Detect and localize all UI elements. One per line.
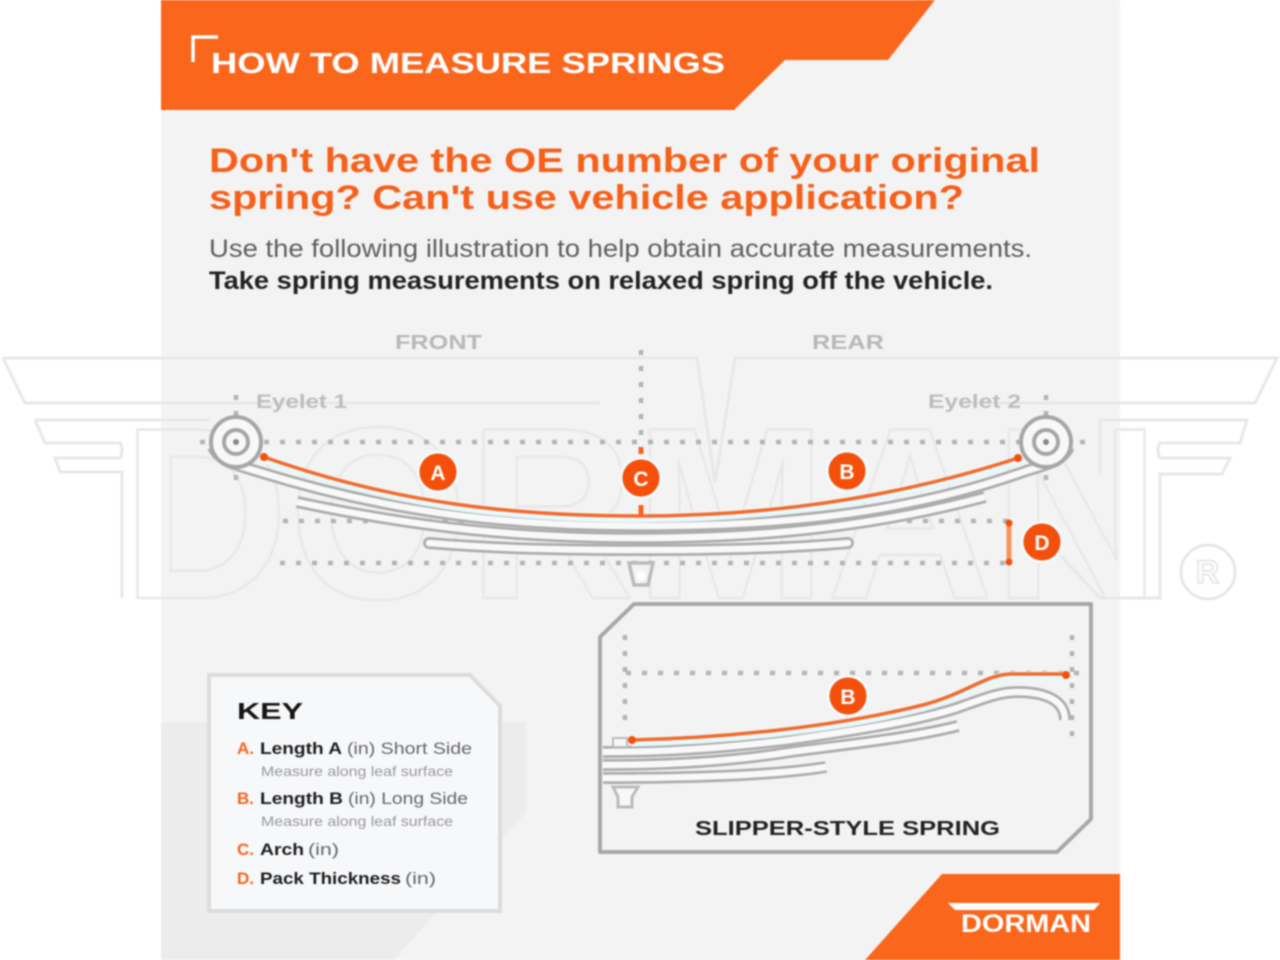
key item B: (in) Long Side xyxy=(348,789,468,808)
slipper bolt xyxy=(613,787,638,807)
watermark: Dorman logo: R xyxy=(1196,554,1219,590)
badge C xyxy=(621,458,661,498)
main leaf xyxy=(213,447,1069,526)
slipper line halo xyxy=(632,676,1066,742)
front and rear labels: REAR xyxy=(812,332,885,354)
watermark: Dorman logo: DORMAN xyxy=(122,376,1160,650)
eyelet 2 xyxy=(1021,417,1071,467)
key item A xyxy=(237,739,472,779)
slipper middle leaf xyxy=(603,726,958,765)
badge B xyxy=(827,451,867,491)
slipper short leaf xyxy=(603,767,826,778)
key item C: (in) xyxy=(308,840,339,859)
arch marker line xyxy=(638,447,644,516)
badge A: A xyxy=(430,462,446,485)
key item A: Measure along leaf surface xyxy=(261,763,453,779)
headline: Don't have the OE number of your original xyxy=(209,142,1040,180)
eyelet labels: Eyelet 1 xyxy=(256,392,348,413)
eyelet labels: Eyelet 2 xyxy=(928,392,1021,413)
measurement line halo xyxy=(264,459,1018,518)
middle leaf xyxy=(297,497,985,538)
front and rear labels: FRONT xyxy=(395,332,482,354)
badge D: D xyxy=(1034,532,1050,555)
key item C: Arch xyxy=(260,840,304,859)
bottom bolt xyxy=(629,563,653,585)
badge B slipper: B xyxy=(840,686,856,709)
panel: key: KEY xyxy=(237,698,303,724)
panel: slipper-style spring xyxy=(600,604,1091,852)
headline: spring? Can't use vehicle application? xyxy=(209,179,964,217)
instructions text: Take spring measurements on relaxed spring off the vehicle. xyxy=(209,267,993,295)
key item C: C. xyxy=(237,840,254,859)
panel: key xyxy=(209,675,500,911)
header banner: HOW TO MEASURE SPRINGS xyxy=(211,48,725,80)
key item D xyxy=(237,869,436,888)
key item A: (in) Short Side xyxy=(347,739,472,758)
spring diagram xyxy=(200,350,1090,585)
key item B: Measure along leaf surface xyxy=(261,813,453,829)
background panel xyxy=(161,0,1120,960)
badge D xyxy=(1022,522,1062,562)
shaded area behind key xyxy=(161,722,526,960)
badge A xyxy=(418,452,458,492)
slipper measurement line xyxy=(628,671,1070,744)
key item A: A. xyxy=(237,739,254,758)
header banner xyxy=(161,0,935,110)
front and rear labels xyxy=(395,332,885,354)
key item A: Length A xyxy=(260,739,342,758)
key item D: D. xyxy=(237,869,254,888)
key item B: Length B xyxy=(260,789,343,808)
key item C xyxy=(237,840,339,859)
key item B: B. xyxy=(237,789,254,808)
key item D: (in) xyxy=(405,869,436,888)
key item D: Pack Thickness xyxy=(260,869,401,888)
badge C: C xyxy=(633,468,649,491)
orange measurement line xyxy=(260,453,1022,516)
slipper small block xyxy=(613,738,627,747)
shortest leaf xyxy=(429,543,848,550)
pack thickness bracket xyxy=(1006,520,1012,566)
eyelet 1 xyxy=(211,417,261,467)
slipper main leaf xyxy=(603,692,1065,752)
instructions text: Use the following illustration to help obtain accurate measurements. xyxy=(209,235,1032,263)
eyelet labels xyxy=(256,392,1021,413)
corner banner with Dorman logo: DORMAN xyxy=(961,910,1091,938)
corner banner with Dorman logo xyxy=(865,874,1120,960)
instructions text xyxy=(209,235,1032,295)
headline xyxy=(209,142,1040,217)
slipper label: SLIPPER-STYLE SPRING xyxy=(695,818,1000,840)
badge B: B xyxy=(839,461,855,484)
badge B slipper xyxy=(828,676,868,716)
key item B xyxy=(237,789,468,829)
